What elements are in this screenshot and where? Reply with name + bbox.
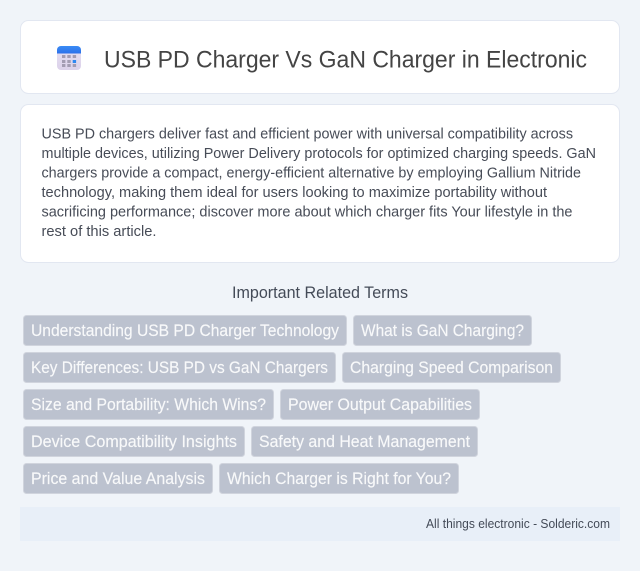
tag <box>252 426 478 456</box>
tag <box>354 316 532 346</box>
tag <box>24 316 346 346</box>
title: USB PD Charger Vs GaN Charger in Electronic <box>104 46 587 74</box>
text block: summary paragraph: USB PD chargers deliver fast and efficient power with universal compatibility across <box>42 126 573 142</box>
tag: Price and Value Analysis <box>31 470 205 488</box>
tag <box>220 464 458 494</box>
text block: summary paragraph: rest of this article. <box>42 224 156 240</box>
text block: summary paragraph: multiple devices, utilizing Power Delivery protocols for optimized charging speeds. GaN <box>42 146 596 162</box>
panel: title card <box>20 20 620 94</box>
tag: Key Differences: USB PD vs GaN Chargers <box>31 359 328 377</box>
tag: Safety and Heat Management <box>259 433 470 451</box>
footer <box>20 507 620 541</box>
tag: Understanding USB PD Charger Technology <box>31 322 340 340</box>
tag <box>24 352 336 382</box>
heading: important related terms: Important Related Terms <box>232 284 408 302</box>
tag: Device Compatibility Insights <box>31 433 237 451</box>
tag: Charging Speed Comparison <box>350 359 553 377</box>
tag <box>24 426 244 456</box>
tag <box>24 464 212 494</box>
tag: Power Output Capabilities <box>288 396 472 414</box>
tag <box>24 390 274 420</box>
text block: summary paragraph: sacrificing performance; discover more about which charger fits Your lifestyle in the <box>42 204 572 220</box>
panel: summary card <box>20 104 620 262</box>
tag: What is GaN Charging? <box>361 322 524 340</box>
footer: All things electronic - Solderic.com <box>426 517 610 531</box>
tag: Size and Portability: Which Wins? <box>31 396 266 414</box>
tag <box>280 390 480 420</box>
text block: summary paragraph: technology, making them ideal for users looking to maximize portability without <box>42 185 547 201</box>
text block: summary paragraph <box>42 126 596 240</box>
tag: Which Charger is Right for You? <box>227 470 451 488</box>
icon: calendar <box>57 46 81 70</box>
text block: summary paragraph: chargers provide a compact, energy-efficient alternative by employing Gallium Nitride <box>42 166 581 182</box>
tag group: related terms <box>24 316 560 494</box>
tag <box>342 352 560 382</box>
